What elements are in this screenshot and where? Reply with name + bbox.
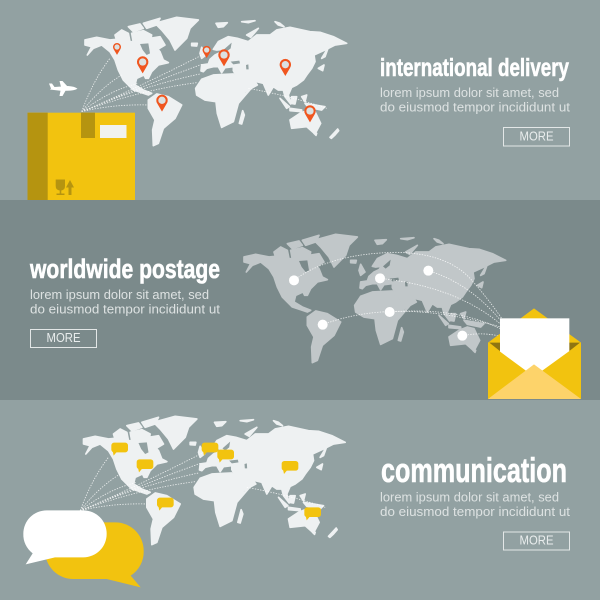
panel: international delivery <box>0 0 600 200</box>
heading: worldwide postage: worldwide postage <box>29 254 220 284</box>
chat markers <box>111 443 321 520</box>
icon: open envelope with letter <box>488 308 581 399</box>
panel: worldwide postage <box>0 200 600 400</box>
text block: postage description <box>30 288 221 316</box>
panel: communication <box>0 400 600 600</box>
text block: delivery description: lorem ipsum dolor sit amet, sed <box>380 86 559 100</box>
text block: communication description: lorem ipsum dolor sit amet, sed <box>380 490 559 504</box>
icon: cardboard box <box>28 113 135 200</box>
text block: communication description <box>380 490 571 519</box>
text block: postage description: lorem ipsum dolor sit amet, sed <box>30 288 209 302</box>
button: more: MORE <box>520 130 554 144</box>
text block: delivery description <box>380 86 571 114</box>
button: more: MORE <box>46 331 80 345</box>
world map <box>244 234 506 363</box>
routes and location dots <box>289 252 502 341</box>
button: more: MORE <box>520 534 554 548</box>
world map with communication routes <box>80 416 345 545</box>
text block: communication description: do eiusmod tempor incididunt ut <box>380 505 571 519</box>
button: more <box>30 330 96 348</box>
button: more <box>504 532 570 550</box>
icon: airplane <box>49 81 78 96</box>
text block: postage description: do eiusmod tempor incididunt ut <box>30 302 221 316</box>
icon: speech bubbles <box>23 510 144 587</box>
text block: delivery description: do eiusmod tempor incididunt ut <box>380 100 571 114</box>
world map with delivery routes and pins <box>82 17 347 146</box>
button: more <box>504 128 570 146</box>
